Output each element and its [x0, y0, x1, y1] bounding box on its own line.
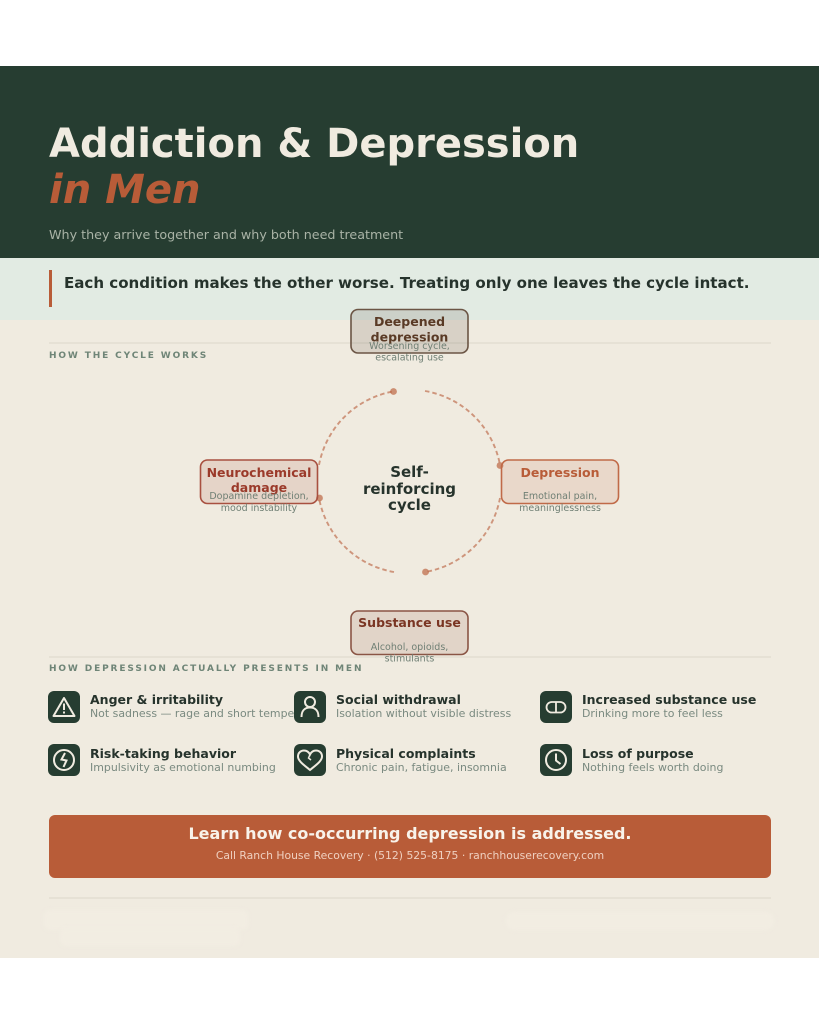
dashed cycle arcs	[319, 391, 500, 572]
node: substance use: Alcohol, opioids,	[371, 642, 448, 653]
icon: heart	[294, 744, 326, 776]
symptom: physical: Chronic pain, fatigue, insomnia	[336, 761, 507, 774]
symptom: physical	[294, 744, 507, 776]
icon: bolt in circle	[48, 744, 80, 776]
node: substance use: Substance use	[358, 615, 461, 630]
arrow dots	[316, 388, 503, 575]
node: depression: Depression	[520, 465, 600, 480]
symptom: purpose	[540, 744, 723, 776]
node: substance use: stimulants	[385, 654, 434, 664]
cycle diagram	[200, 308, 620, 664]
node: depression: meaninglessness	[519, 503, 601, 514]
faded footer logo smudge	[42, 908, 250, 948]
call to action panel	[49, 815, 771, 878]
title accent: in Men	[49, 167, 201, 213]
symptom: substance use	[540, 691, 756, 723]
section heading: presentation	[49, 656, 771, 676]
footer divider	[49, 897, 771, 899]
symptom: physical: Physical complaints	[336, 746, 476, 761]
section heading: presentation: HOW DEPRESSION ACTUALLY PRESENTS IN MEN	[49, 664, 363, 674]
symptom: withdrawal	[294, 691, 511, 723]
call to action heading: Learn how co-occurring depression is addressed.	[188, 824, 632, 843]
node: substance use	[351, 611, 468, 664]
node: deepened depression: Deepened	[374, 314, 445, 329]
icon: warning triangle	[48, 691, 80, 723]
subtitle: Why they arrive together and why both need treatment	[49, 227, 403, 242]
node: neurochemical damage: Neurochemical	[207, 465, 311, 480]
symptom: substance use: Increased substance use	[582, 692, 756, 707]
icon: capsule	[540, 691, 572, 723]
header band	[0, 66, 819, 258]
node: deepened depression: Worsening cycle,	[369, 341, 450, 352]
centre label: reinforcing	[363, 480, 456, 498]
symptom: withdrawal: Social withdrawal	[336, 692, 461, 707]
symptom: substance use: Drinking more to feel less	[582, 707, 723, 720]
accent bar	[49, 270, 52, 307]
symptom: anger	[48, 691, 299, 723]
node: deepened depression: depression	[371, 330, 448, 344]
icon: clock	[540, 744, 572, 776]
node: deepened depression: escalating use	[375, 352, 444, 364]
node: deepened depression	[351, 310, 468, 364]
centre label: cycle	[388, 496, 431, 514]
symptom: risk	[48, 744, 276, 776]
node: depression	[502, 460, 618, 514]
section heading: cycle: HOW THE CYCLE WORKS	[49, 351, 208, 361]
symptom: purpose: Nothing feels worth doing	[582, 761, 723, 774]
symptom: risk: Impulsivity as emotional numbing	[90, 761, 276, 774]
node: neurochemical damage: damage	[231, 480, 287, 495]
node: neurochemical damage	[200, 460, 318, 514]
node: neurochemical damage: Dopamine depletion,	[209, 491, 309, 502]
centre label: Self-	[390, 463, 429, 481]
key message band	[0, 258, 819, 320]
node: neurochemical damage: mood instability	[221, 503, 298, 514]
call to action contact: Call Ranch House Recovery · (512) 525-8175 · ranchhouserecovery.com	[216, 849, 604, 862]
key message: Each condition makes the other worse. Treating only one leaves the cycle intact.	[64, 274, 749, 292]
icon: person	[294, 691, 326, 723]
centre label	[363, 463, 456, 514]
symptom: anger: Anger & irritability	[90, 692, 223, 707]
symptom: risk: Risk-taking behavior	[90, 746, 236, 761]
symptom: anger: Not sadness — rage and short temper	[90, 707, 299, 720]
node: depression: Emotional pain,	[523, 491, 597, 502]
symptom: purpose: Loss of purpose	[582, 746, 694, 761]
section heading: cycle	[49, 342, 771, 362]
symptom: withdrawal: Isolation without visible distress	[336, 707, 511, 720]
faded footer text smudge	[506, 912, 774, 930]
title: Addiction & Depression	[49, 121, 579, 167]
